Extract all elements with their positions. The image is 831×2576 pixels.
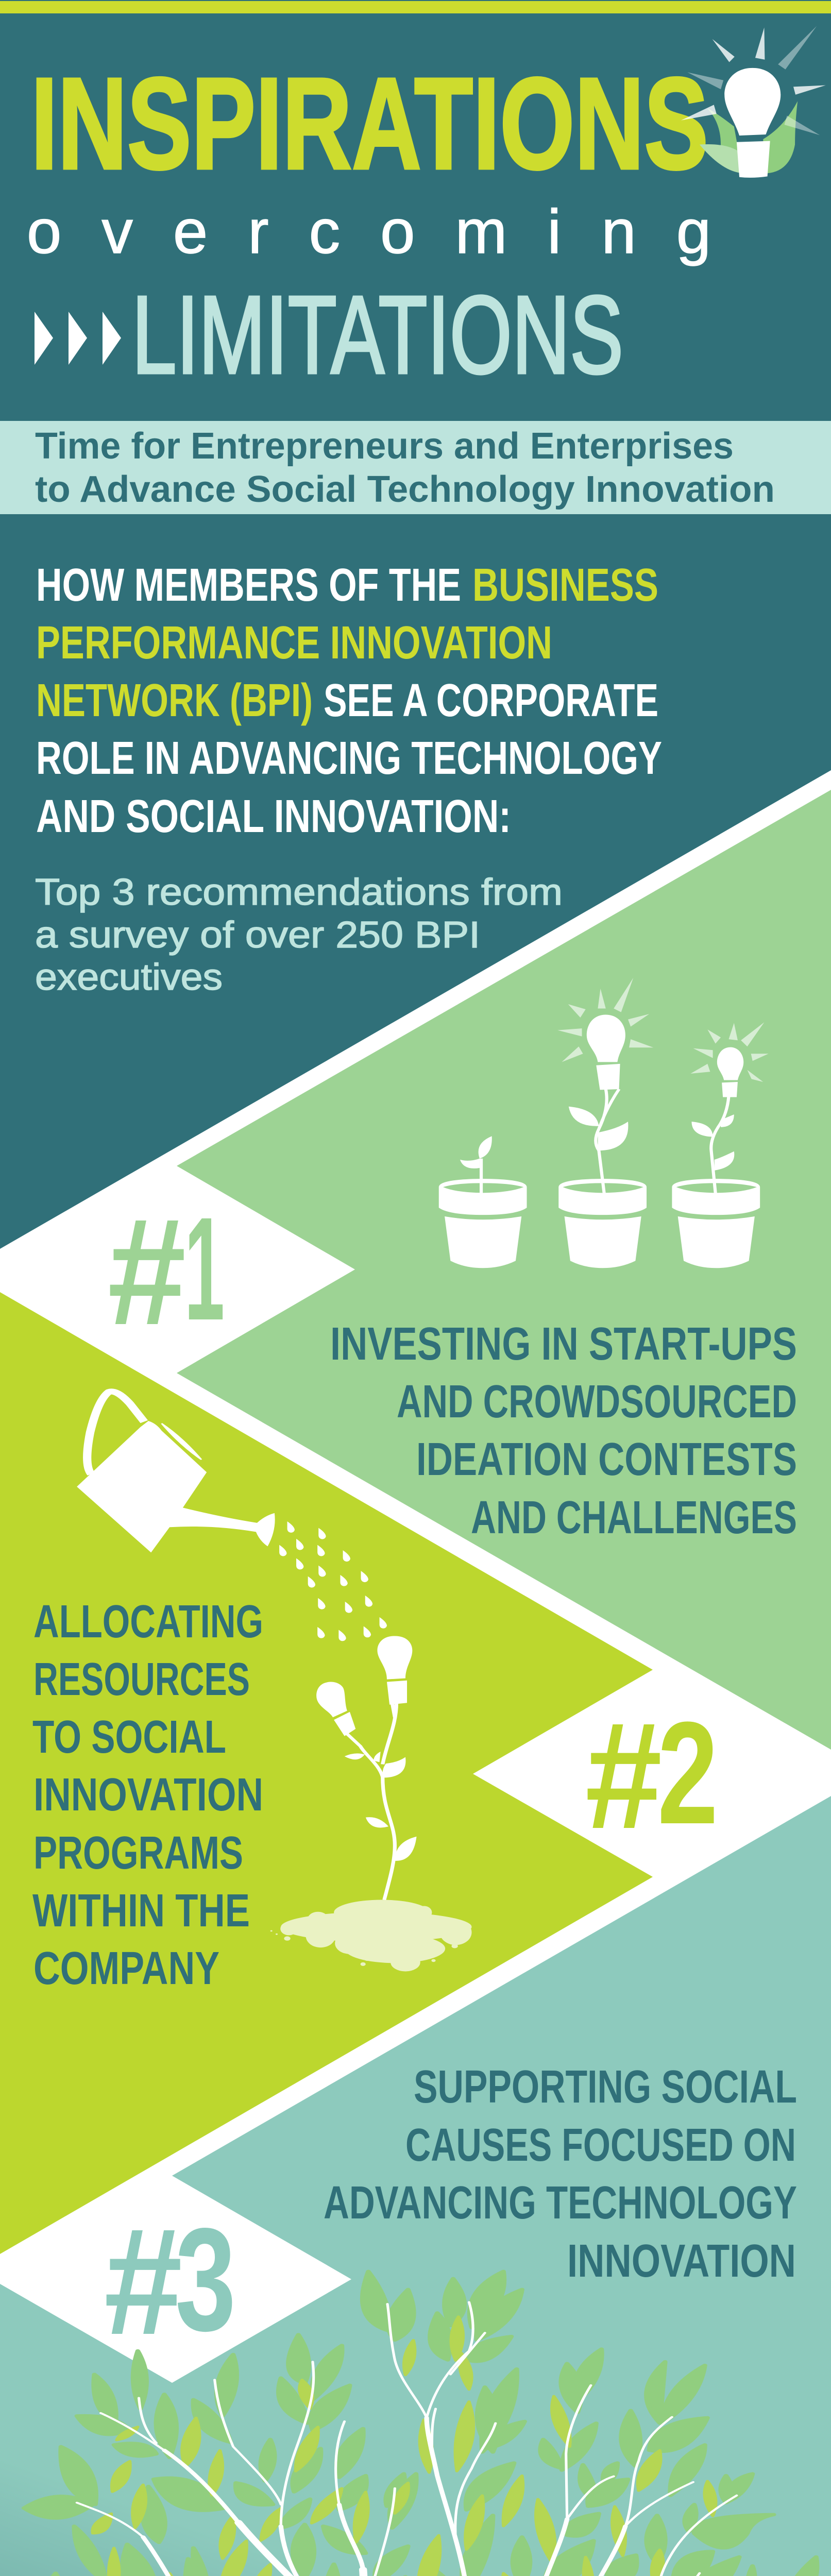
number: #3: 3 <box>175 2198 236 2362</box>
text: recommendation 2: WITHIN THE <box>32 1885 250 1937</box>
pot 3 <box>672 1179 760 1268</box>
text: survey description: a survey of over 250 BPI <box>35 914 480 956</box>
pot 2 <box>558 1179 647 1268</box>
text: recommendation 2 <box>32 1596 263 1994</box>
text: recommendation 3 <box>324 2061 797 2287</box>
text: recommendation 2: TO SOCIAL <box>32 1711 226 1763</box>
heading: how members see a corporate role: NETWORK (BPI) <box>36 675 313 726</box>
panel: recommendation 3 with gradient <box>0 1796 831 2576</box>
number: #1: # <box>108 1187 186 1357</box>
title: overcoming: overcoming <box>27 196 711 266</box>
heading: how members see a corporate role: HOW MEMBERS OF THE <box>36 560 461 611</box>
panel: header background <box>0 0 831 1249</box>
text: recommendation 2: ALLOCATING <box>33 1596 263 1648</box>
text: recommendation 2: RESOURCES <box>33 1654 250 1705</box>
heading: how members see a corporate role: ROLE IN ADVANCING TECHNOLOGY <box>36 733 662 784</box>
pot 1 <box>439 1179 527 1268</box>
water drops <box>279 1521 387 1641</box>
text: recommendation 2: INNOVATION <box>33 1769 263 1821</box>
panel: recommendation 2 <box>0 1292 653 2254</box>
number: #2: # <box>585 1690 662 1860</box>
illustration: tree with leaves <box>0 2272 831 2576</box>
stem, leaves, bulbs <box>316 1636 417 1900</box>
heading: how members see a corporate role: AND SOCIAL INNOVATION: <box>36 791 511 842</box>
number: #2 <box>585 1690 718 1860</box>
branches upper <box>0 2302 831 2576</box>
heading: how members see a corporate role <box>36 560 662 842</box>
text: survey description <box>35 872 563 998</box>
text: survey description: executives <box>35 957 223 998</box>
title: limitations: LIMITATIONS <box>132 273 623 397</box>
top accent bar <box>0 1 831 13</box>
icon: triple chevrons <box>35 312 121 365</box>
heading: how members see a corporate role: SEE A CORPORATE <box>324 675 658 726</box>
icon: potted seedlings with bulbs <box>439 978 769 1268</box>
text: survey description: Top 3 recommendations from <box>35 872 563 913</box>
heading: how members see a corporate role: PERFORMANCE INNOVATION <box>36 617 552 669</box>
green leaves upper <box>0 2272 831 2576</box>
text: recommendation 1 <box>330 1318 797 1544</box>
subtitle band: to Advance Social Technology Innovation <box>35 469 775 510</box>
stems and leaves <box>460 1089 734 1193</box>
icon: light bulb with leaves <box>681 26 826 178</box>
soil <box>270 1900 472 1971</box>
number: #3: # <box>104 2196 182 2366</box>
heading: how members see a corporate role: BUSINESS <box>472 560 658 611</box>
number: #2: 2 <box>657 1691 718 1854</box>
number: #3 <box>104 2196 236 2366</box>
text: recommendation 2: COMPANY <box>33 1943 219 1994</box>
subtitle band <box>0 421 831 514</box>
icon: sapling with bulbs growing from soil <box>270 1636 472 1971</box>
panel: recommendation 1 <box>177 790 831 1750</box>
subtitle band: Time for Entrepreneurs and Enterprises <box>35 426 734 467</box>
text: recommendation 2: PROGRAMS <box>33 1827 243 1879</box>
infographic canvas: 1 <box>184 1187 225 1351</box>
lime leaves upper <box>42 2316 768 2576</box>
icon: watering can <box>77 1392 387 1641</box>
